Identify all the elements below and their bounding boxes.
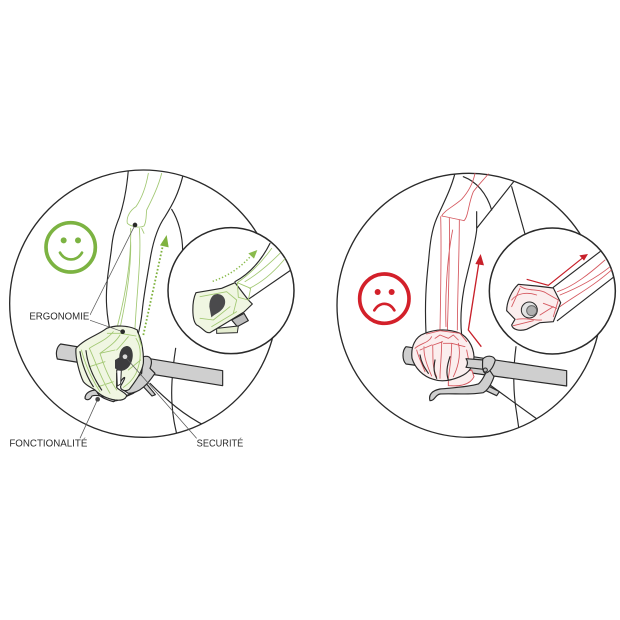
inset dark grip [209, 294, 225, 317]
inset handle [232, 313, 248, 327]
text ergonomie: ERGONOMIE [29, 311, 90, 322]
inset lower fingers [217, 326, 238, 333]
text fonctionalité: FONCTIONALITÉ [9, 437, 88, 450]
dark grip [115, 346, 133, 371]
lever pin right [486, 386, 499, 396]
leader lines [80, 223, 197, 438]
main circle outline right [337, 173, 601, 437]
panel: bad posture [337, 173, 615, 437]
finger shadows [80, 351, 102, 390]
inset red arrow [527, 257, 583, 285]
hand bones red [415, 331, 467, 348]
inset forearm right [553, 252, 600, 287]
arm and body contours left [106, 170, 207, 437]
clamp right [466, 356, 495, 373]
label background: ergonomie [29, 309, 90, 321]
lower palm right [448, 370, 474, 386]
forearm bones red [440, 173, 488, 331]
hand bones green [81, 332, 142, 393]
hand right [412, 330, 474, 381]
brake lever right [430, 368, 494, 401]
forearm bones green [107, 173, 162, 335]
inset bar end [521, 302, 537, 318]
inset circle: good wrist [168, 228, 294, 354]
sad face [360, 274, 409, 323]
finger shadows right [420, 355, 450, 380]
hand left [76, 326, 143, 400]
handlebar right [403, 347, 567, 386]
green dotted arrow main [143, 235, 169, 335]
handlebar left [56, 344, 223, 386]
inset circle: bad wrist [489, 228, 615, 354]
arm and body contours right [425, 173, 538, 437]
inset forearm left [235, 243, 270, 282]
bar clamp left [123, 356, 155, 393]
text sécurité: SECURITÉ [197, 437, 244, 450]
grip stem [117, 370, 121, 386]
smiley face [46, 223, 95, 272]
panel: good posture [9, 170, 294, 450]
inset hand left [193, 283, 252, 333]
inset fist right [507, 284, 561, 330]
brake lever left [85, 384, 155, 402]
red arrow main [468, 254, 484, 347]
inset green dotted arrow [213, 255, 252, 281]
main circle outline left [10, 170, 277, 437]
